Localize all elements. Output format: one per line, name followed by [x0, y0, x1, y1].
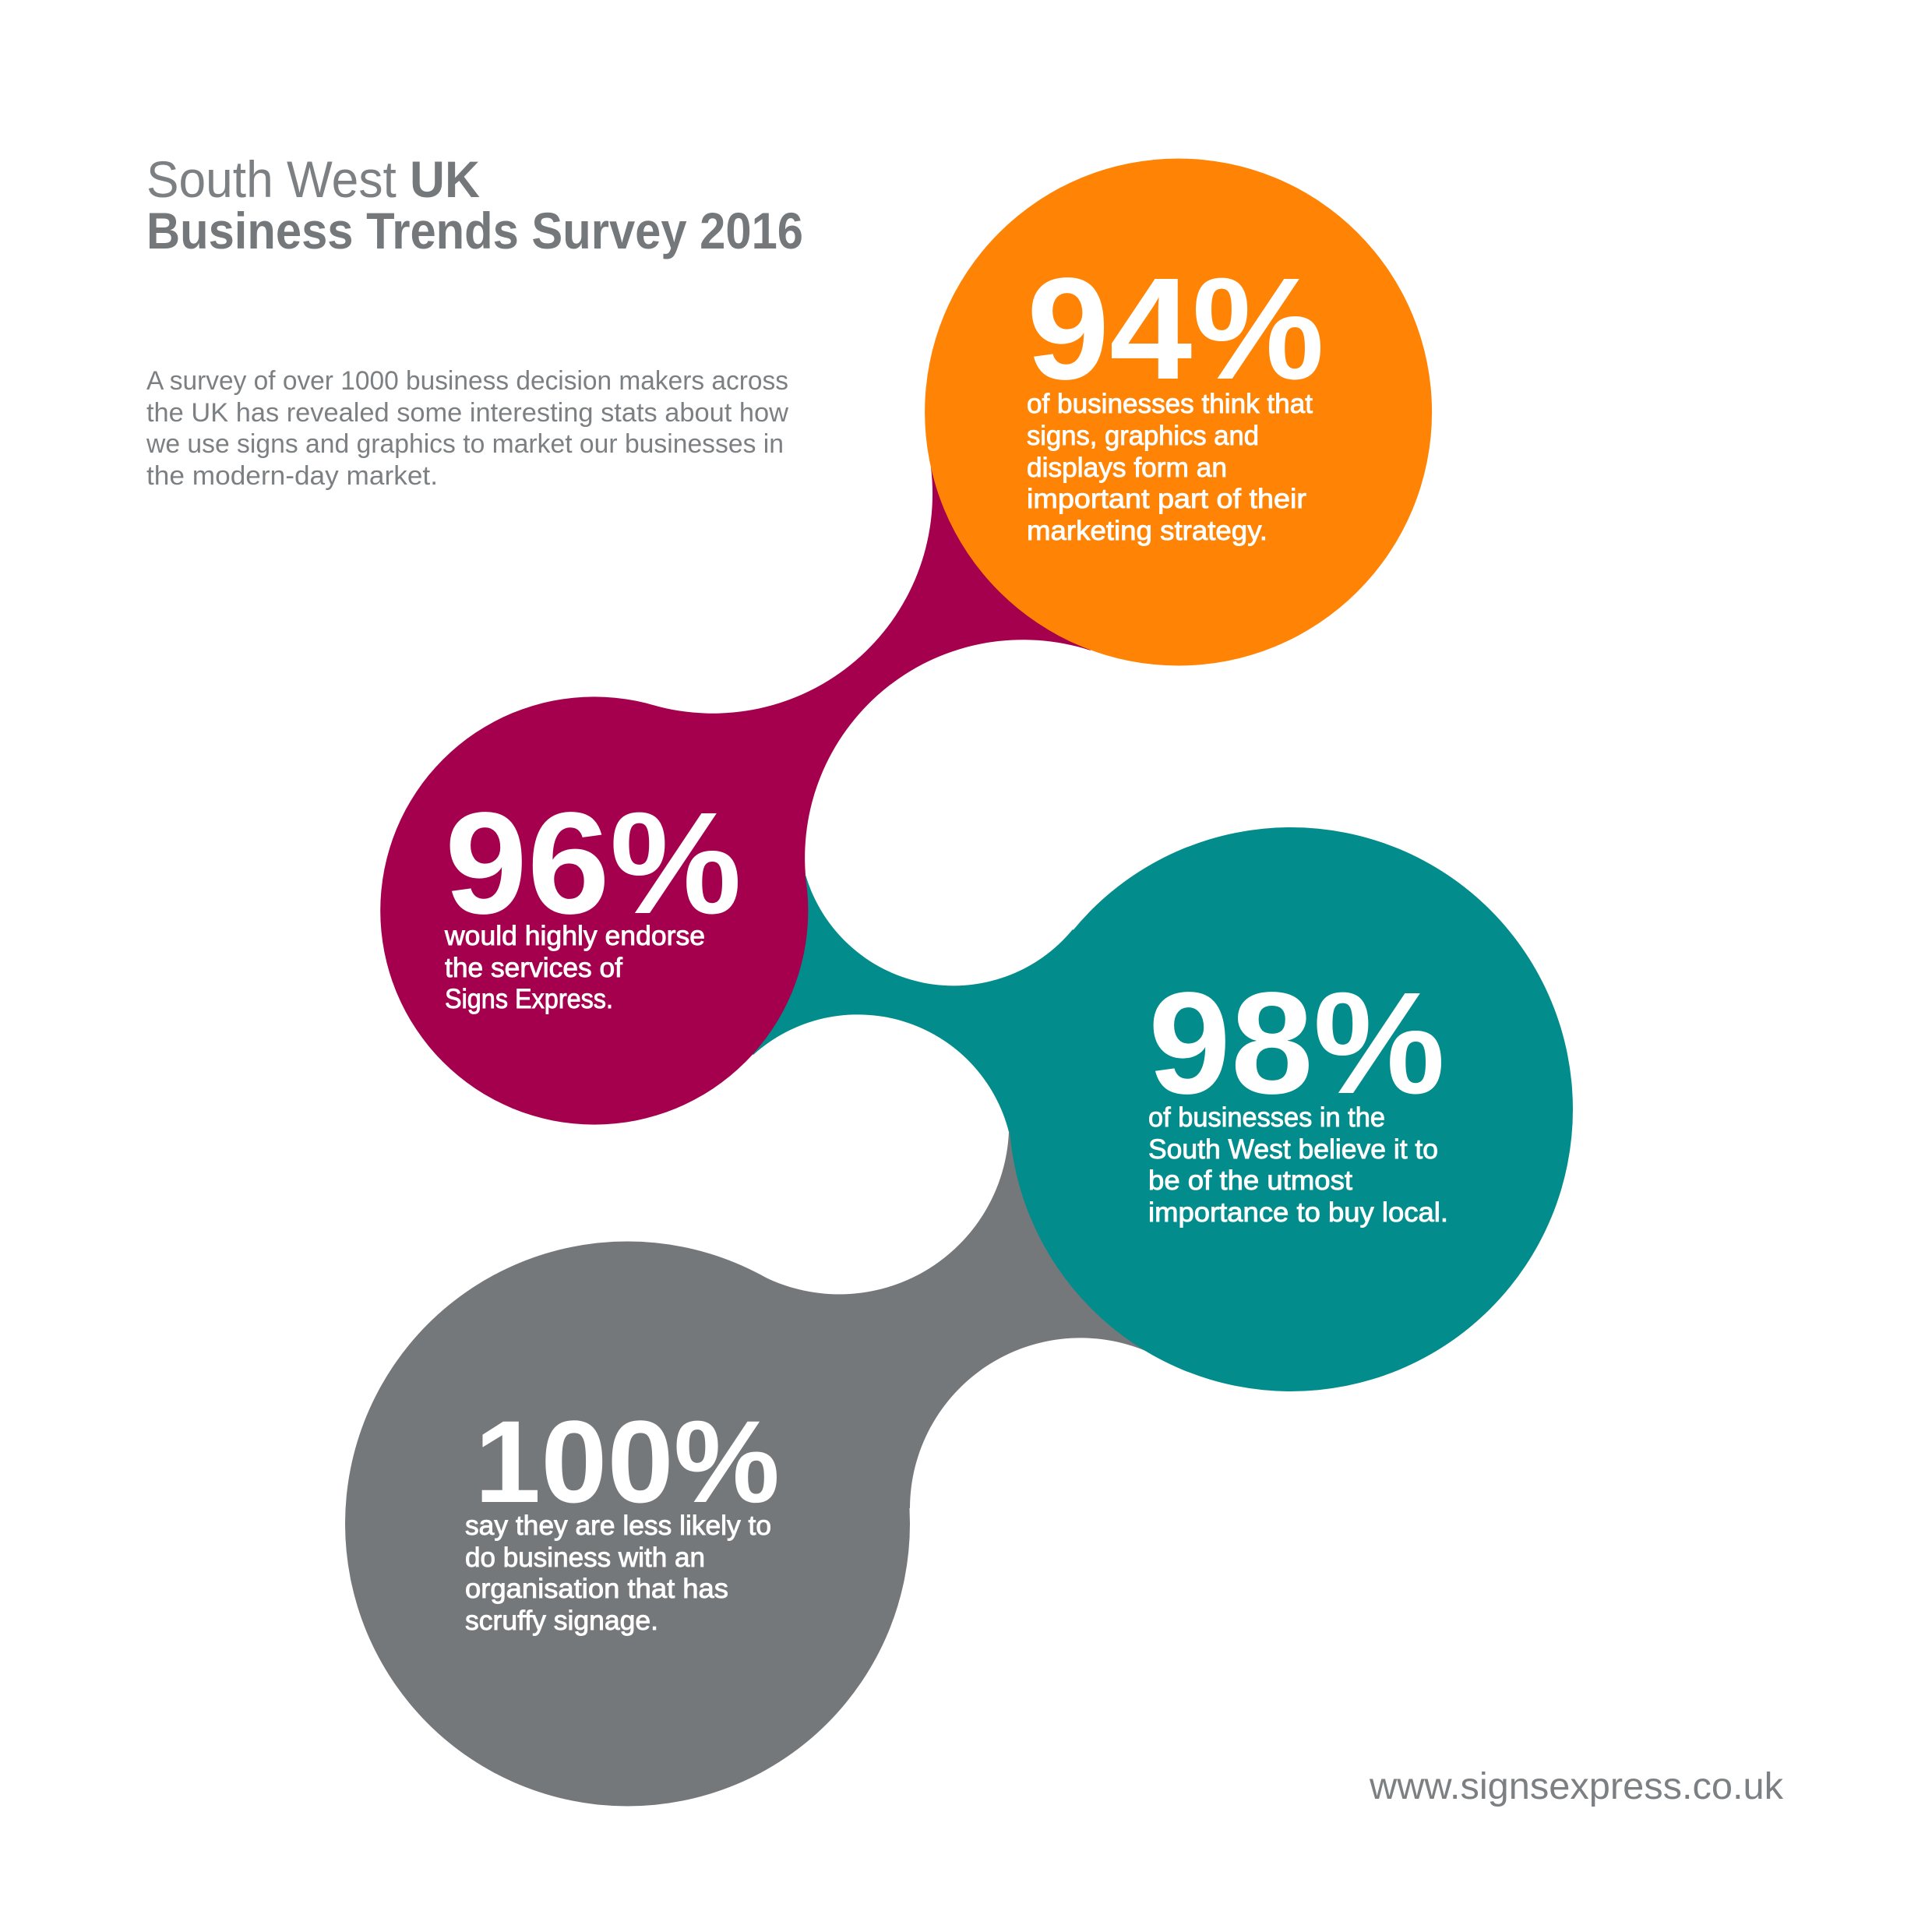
connector: maroon to orange [594, 467, 1091, 911]
intro text block: the modern-day market. [146, 461, 438, 491]
description: 94%: signs, graphics and [1027, 421, 1259, 451]
connector: teal to maroon [594, 875, 1291, 1132]
description: 100% [465, 1511, 771, 1636]
description: 94%: displays form an [1027, 453, 1227, 483]
panel: 98% teal circle [1009, 827, 1573, 1391]
stat: 94%: 94% [1027, 249, 1324, 410]
intro text block [146, 366, 788, 491]
panel: 94% orange circle [925, 159, 1432, 665]
description: 96%: the services of [445, 953, 622, 983]
description: 96%: Signs Express. [445, 984, 613, 1014]
connector: gray to teal [627, 1109, 1291, 1524]
description: 100%: do business with an [465, 1542, 705, 1573]
website url: www.signsexpress.co.uk [1369, 1766, 1784, 1807]
panel: 96% maroon circle [380, 696, 808, 1125]
description: 94%: marketing strategy. [1027, 516, 1267, 546]
description: 98%: be of the utmost [1148, 1165, 1352, 1196]
panel: 100% gray circle [345, 1242, 910, 1806]
description: 98% [1148, 1102, 1448, 1228]
description: 100%: say they are less likely to [465, 1511, 771, 1541]
description: 100%: scruffy signage. [465, 1606, 658, 1636]
stat: 100%: 100% [474, 1396, 780, 1527]
description: 94%: important part of their [1027, 484, 1306, 514]
description: 96% [444, 921, 705, 1014]
description: 98%: South West believe it to [1148, 1134, 1438, 1165]
intro text block: A survey of over 1000 business decision makers across [146, 366, 788, 396]
intro text block: we use signs and graphics to market our businesses in [146, 429, 784, 459]
title [146, 150, 803, 259]
description: 96%: would highly endorse [444, 921, 705, 951]
intro text block: the UK has revealed some interesting stats about how [146, 398, 788, 428]
description: 98%: importance to buy local. [1148, 1197, 1448, 1228]
description: 100%: organisation that has [465, 1574, 728, 1604]
description: 98%: of businesses in the [1148, 1102, 1385, 1133]
title: South West UK [146, 150, 480, 208]
stat: 98%: 98% [1148, 963, 1445, 1124]
description: 94% [1027, 389, 1313, 546]
description: 94%: of businesses think that [1027, 389, 1313, 419]
title: Business Trends Survey 2016 [146, 202, 803, 259]
stat: 96%: 96% [445, 783, 742, 944]
